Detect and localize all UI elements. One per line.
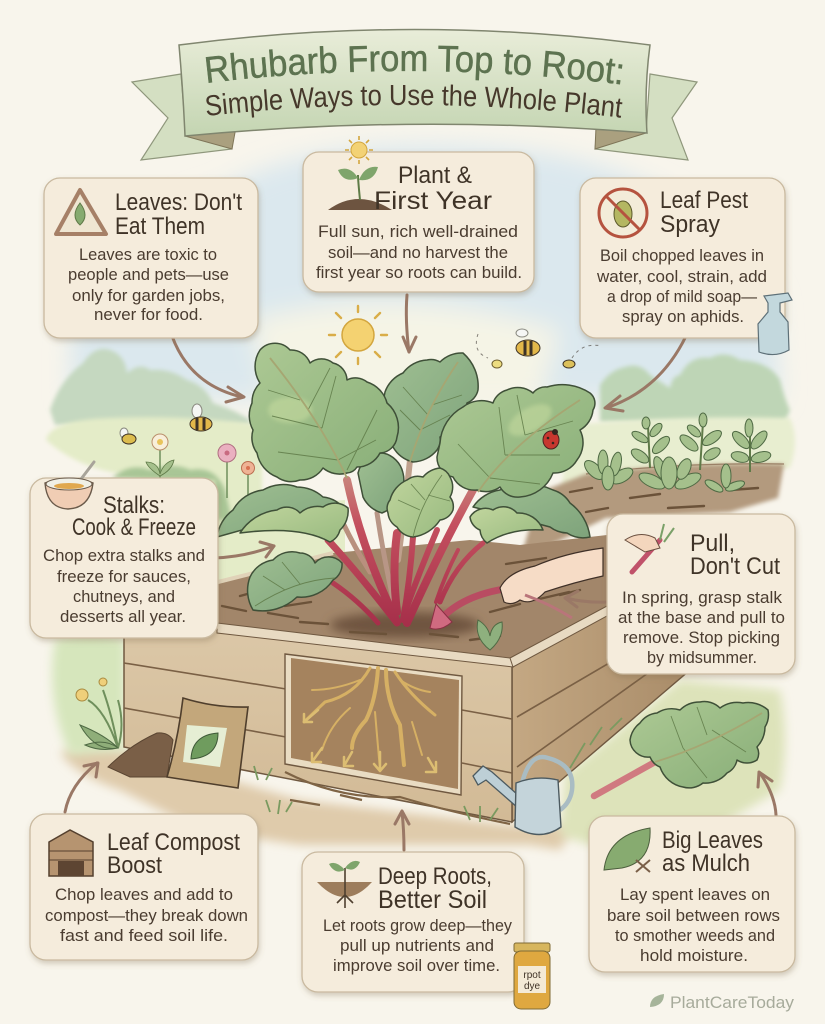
bed top rim (217, 606, 607, 667)
roots (304, 668, 436, 772)
panel: stalks cook and freeze: chutneys, and (73, 587, 175, 606)
panel: plant and first year (303, 136, 534, 292)
panel: stalks cook and freeze: desserts all year. (60, 607, 186, 626)
icon: sprout on soil (328, 167, 392, 210)
panel: stalks cook and freeze: Chop extra stalks and (43, 546, 205, 565)
pulled stalk base (430, 604, 452, 629)
ribbon face (179, 30, 650, 136)
hand pulling stalk (500, 548, 603, 618)
panel: leaf pest spray: water, cool, strain, add (596, 267, 767, 286)
icon: dye jar: dye (524, 981, 540, 992)
panel: deep roots: Deep Roots, (378, 863, 492, 890)
icon: top sun (345, 136, 373, 164)
panel: pull, don't cut: at the base and pull to (618, 608, 785, 627)
shrub strip behind stalks panel (112, 466, 232, 520)
compost bag (167, 698, 248, 788)
bees (120, 329, 602, 444)
panel: leaf pest spray: a drop of mild soap— (607, 287, 757, 306)
arrow: plant (403, 295, 416, 352)
panel: plant and first year: First Year (374, 187, 492, 215)
right meadow (560, 417, 795, 500)
title banner (130, 28, 698, 161)
panel: plant and first year: soil—and no harvest the (328, 243, 508, 262)
compost pile (108, 733, 173, 777)
icon: hand and stalk (625, 524, 674, 572)
panel: stalks cook and freeze (30, 462, 218, 638)
daisy (152, 434, 168, 450)
icon: bowl (45, 462, 94, 509)
tall wildflower (76, 678, 122, 749)
panel: leaves warning: people and pets—use (68, 265, 229, 284)
title text: Rhubarb From Top to Root: (206, 46, 622, 84)
panel: plant and first year: first year so roots can build. (316, 263, 522, 282)
panel: deep roots: Better Soil (378, 886, 487, 914)
panel: leaf compost boost: Leaf Compost (107, 829, 240, 856)
stalks (328, 460, 520, 629)
bee left (190, 404, 212, 431)
row plant three (730, 419, 772, 472)
icon: sprout with roots (317, 861, 372, 908)
arrow: stalks (214, 542, 274, 558)
arrow: leaves (172, 336, 244, 402)
leaf: big left (249, 343, 398, 482)
panel: plant and first year: Full sun, rich well-drained (318, 222, 518, 241)
icon: dye jar (514, 943, 550, 1009)
right ribbon fold (595, 127, 646, 149)
panel: pull, don't cut: remove. Stop picking (623, 628, 780, 647)
icon: compost bin (49, 830, 93, 876)
meadow (46, 417, 262, 590)
arrow: compost (65, 763, 98, 812)
panel: pull, don't cut: Don't Cut (690, 553, 780, 580)
ground (52, 635, 785, 850)
panel: stalks cook and freeze: Stalks: (103, 492, 165, 519)
row bush two (637, 455, 703, 492)
loose rhubarb leaf (594, 702, 768, 796)
ladybug (543, 429, 559, 449)
panel: big leaves as mulch: to smother weeds and (615, 926, 775, 945)
panel: pull, don't cut: by midsummer. (647, 648, 757, 667)
panel: leaves warning: Leaves: Don't (115, 189, 242, 216)
panel: deep roots: improve soil over time. (333, 956, 500, 975)
panel: leaf compost boost: compost—they break down (45, 906, 248, 925)
panel: big leaves as mulch: Big Leaves (662, 827, 763, 854)
bed front face (124, 618, 512, 822)
panel: plant and first year: Plant & (398, 162, 472, 189)
panel: leaf pest spray: Boil chopped leaves in (600, 246, 764, 265)
panel: big leaves as mulch (589, 816, 795, 972)
panel: leaf pest spray: Spray (660, 211, 720, 238)
panel: big leaves as mulch: as Mulch (662, 850, 750, 877)
small seedling (477, 620, 502, 650)
sun (329, 306, 387, 364)
icon: leaf with cross (604, 828, 650, 872)
background hills (50, 349, 790, 425)
panel: leaf pest spray (580, 178, 792, 355)
panel: pull, don't cut: Pull, (690, 530, 735, 557)
arrow: pull (565, 591, 608, 607)
panel: leaf compost boost: Chop leaves and add to (55, 885, 233, 904)
panel: leaves warning: Leaves are toxic to (79, 245, 217, 264)
bee small right (492, 360, 575, 368)
leaf: big right (437, 385, 595, 497)
panel: deep roots: Let roots grow deep—they (323, 916, 512, 935)
panel: stalks cook and freeze: freeze for sauces, (57, 567, 191, 586)
panel: leaves warning: never for food. (94, 305, 203, 324)
field soil (520, 464, 784, 560)
row bush one (581, 450, 635, 490)
panel: leaf pest spray: Leaf Pest (660, 187, 748, 214)
bee top (516, 329, 540, 356)
icon: spray bottle (758, 293, 792, 355)
left ribbon fold (185, 127, 236, 149)
leaf: top centre (384, 353, 478, 462)
icon: dye jar: rpot (523, 970, 541, 981)
icon: warning triangle with leaf (56, 190, 106, 234)
panel: leaf compost boost: fast and feed soil life. (60, 926, 228, 945)
arrow: mulch (758, 772, 776, 815)
soil window with roots (285, 654, 462, 795)
meadow behind plant (218, 500, 345, 590)
panel: leaves warning (44, 178, 258, 338)
panel: deep roots: pull up nutrients and (340, 936, 494, 955)
panel: big leaves as mulch: bare soil between rows (607, 906, 780, 925)
plank lines (124, 645, 655, 773)
panel: leaf pest spray: spray on aphids. (622, 307, 744, 326)
panel: deep roots (302, 852, 524, 992)
right ribbon tail (595, 74, 697, 160)
left ribbon tail (132, 74, 232, 160)
grass tufts (254, 718, 622, 822)
soil top (217, 535, 607, 658)
panel: stalks cook and freeze: Cook & Freeze (72, 514, 196, 541)
coral flower (242, 462, 254, 474)
row plant one (629, 417, 672, 468)
back rim (218, 553, 333, 582)
panel: leaf compost boost: Boost (107, 852, 162, 879)
icon: no bug (599, 189, 647, 237)
bed right side (512, 612, 690, 822)
arrows (65, 295, 776, 850)
arrow: pest (605, 336, 686, 411)
back leaves (217, 453, 590, 538)
panel: leaves warning: Eat Them (115, 213, 205, 240)
pink flower (218, 444, 236, 462)
panel: leaves warning: only for garden jobs, (72, 286, 225, 305)
panel: leaf compost boost (30, 814, 258, 960)
bee small left (120, 428, 136, 444)
watering can (473, 757, 572, 834)
panel: pull, don't cut: In spring, grasp stalk (622, 588, 783, 607)
watermark: PlantCareToday (670, 993, 795, 1012)
low leaves (240, 468, 543, 611)
soil crack (285, 772, 510, 824)
subtitle text: Simple Ways to Use the Whole Plant (206, 84, 622, 118)
row plant two (677, 413, 724, 470)
panel: big leaves as mulch: Lay spent leaves on (620, 885, 770, 904)
panel: pull, don't cut (607, 514, 795, 674)
row bush three (703, 464, 746, 494)
raised bed (124, 535, 690, 822)
wildflowers (146, 434, 254, 498)
arrow: roots (395, 811, 409, 850)
panel: big leaves as mulch: hold moisture. (640, 946, 748, 965)
sky wash (70, 145, 780, 400)
